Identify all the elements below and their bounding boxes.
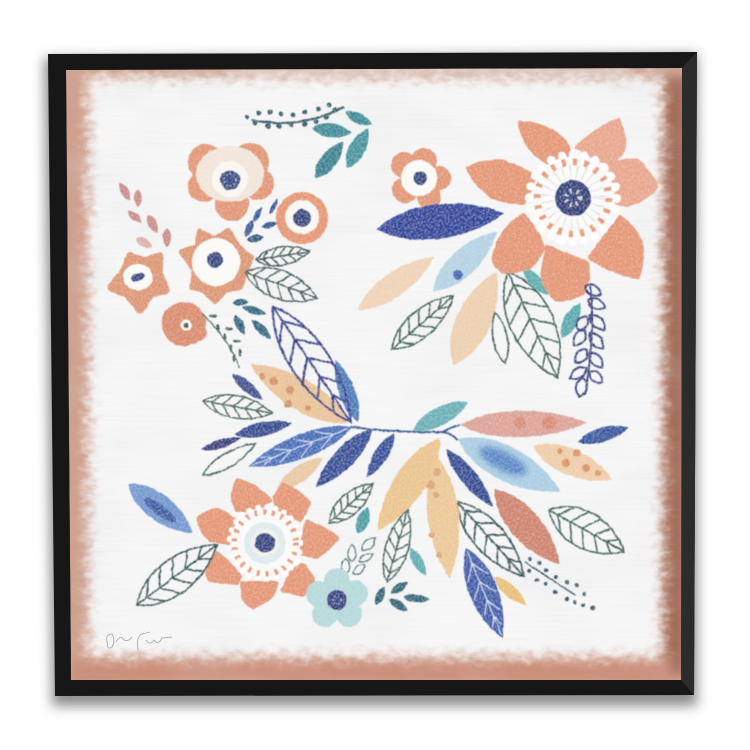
large coral flower — [468, 120, 657, 300]
canvas with painted border — [66, 62, 686, 682]
navy outlined sprig — [567, 281, 609, 398]
flower: small round peach — [276, 192, 328, 244]
small teal leaves — [231, 298, 274, 342]
pale teal flower — [306, 568, 368, 627]
frame right side highlight — [681, 52, 697, 695]
veined leaves beside flowers — [240, 243, 322, 312]
flower: top left peach — [188, 143, 274, 221]
top teal sprig — [245, 103, 375, 183]
lower left veined leaf — [127, 531, 227, 619]
black picture frame — [48, 52, 697, 696]
frame shadow — [44, 54, 697, 706]
floral artwork — [112, 103, 657, 643]
small green sprig — [202, 314, 242, 368]
branch leaves left — [199, 296, 366, 497]
small top peach flower — [391, 148, 451, 209]
lower coral flower — [199, 480, 337, 607]
artist signature — [107, 632, 172, 650]
flower: lower left dark peach — [162, 302, 207, 346]
branch leaves right — [409, 394, 633, 643]
upper right leaves — [351, 196, 586, 387]
small outlined sprig — [341, 535, 378, 577]
left blue leaf — [120, 474, 201, 543]
small teal cluster — [372, 579, 430, 614]
branch leaves centre — [308, 422, 465, 585]
small navy leaves by flowers — [243, 198, 280, 244]
dotted sprig — [525, 557, 595, 610]
flower: left five petal — [112, 257, 165, 309]
pink bud leaves — [116, 181, 171, 251]
branch stem — [350, 425, 460, 440]
flower: star shaped centre — [182, 231, 251, 301]
